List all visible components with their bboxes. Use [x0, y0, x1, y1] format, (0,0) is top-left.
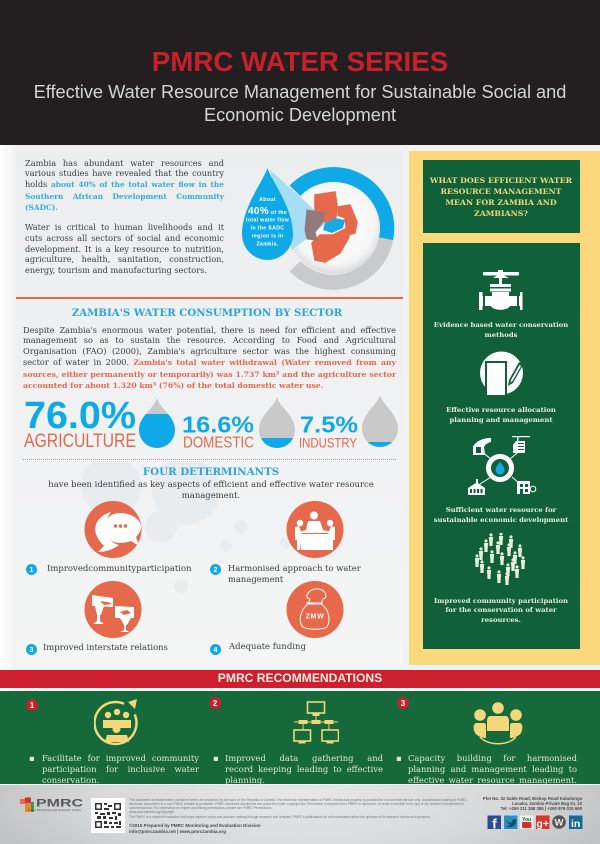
text: resource allocation: planning and management [449, 416, 553, 424]
consumption paragraph: management so as to sustain the resource. According to Food and Agricultural [23, 335, 396, 345]
social icons [487, 815, 583, 830]
left panel background [16, 151, 403, 665]
agriculture figure [24, 398, 175, 448]
recommendations banner: PMRC RECOMMENDATIONS [218, 671, 382, 685]
benefits list panel [422, 243, 580, 649]
question heading: RESOURCE MANAGEMENT [441, 187, 561, 196]
number badge 4: 4 [213, 645, 218, 654]
paragraph: water share: holds about 40% of the total water flow in the [25, 179, 224, 189]
map graphic: SADC donut and drop: About [259, 197, 276, 203]
consumption paragraph: sector of water in 2000. Zambia's total water withdrawal (Water removed from any [23, 357, 396, 367]
orange divider [16, 296, 403, 298]
text: recommendation 3: planning and management leading to [408, 764, 577, 774]
text: recommendation 2: Improved data gathering and [225, 752, 383, 762]
social icons: You [522, 817, 531, 823]
map graphic: SADC donut and drop: 40% of the [248, 206, 287, 217]
subtitle [34, 82, 566, 125]
label 2: management [228, 574, 283, 584]
map graphic: SADC donut and drop: total water flow [246, 218, 290, 224]
label 3: Improved interstate relations [43, 642, 168, 652]
legal text: This document and trademarks contained herein are protected by the laws of The Republic of Zambia. The electronic representation of PMRC intellectual property is provided for non-commercial use only. Unauthorized posting of PMRC electronic documents to a non-PMRC website is prohibited. PMRC electronic documents are protected under copyright law. Permission is required from PMRC to reproduce, or reuse in another form, any of our research documents for commercial use. For information on reprint and linking permissions, please see PMRC Permissions. [129, 798, 467, 810]
address: Plot No. 32 Sable Road, Bishop Road Kabulonga [483, 796, 582, 801]
subtitle: Effective Water Resource Management for Sustainable Social and [34, 82, 566, 102]
subtitle: Economic Development [204, 104, 396, 124]
text: recommendation 3: effective water resource management. [408, 774, 577, 784]
paragraph: water share [24, 158, 224, 212]
text: sufficient water: Sufficient water resource for [446, 506, 556, 514]
text: community participation: for the conservation of water [445, 606, 557, 614]
text: resource allocation [446, 406, 556, 424]
consumption paragraph: Despite Zambia's enormous water potential, there is need for efficient and effective [23, 324, 396, 334]
paragraph: water share: Southern African Development Community [25, 192, 224, 201]
determinant 4 [210, 642, 306, 655]
label 1: Improvedcommunityparticipation [47, 564, 192, 574]
header band [0, 0, 600, 144]
domestic figure: DOMESTIC [183, 434, 254, 452]
legal text: The PMRC is a nonprofit institution that helps improve policy and decision making through research and analysis. PMRC's publications do not necessarily reflect the opinions of its research clients and sponsors. [129, 815, 431, 819]
recommendations banner [0, 670, 600, 688]
text: conservation methods: Evidence based water conservation [434, 321, 568, 329]
text: community participation [434, 596, 568, 624]
social icons: g+ [536, 818, 549, 830]
text: community participation: Improved community participation [434, 596, 568, 604]
consumption paragraph: accounted for about 1.320 km³ (76%) of the total domestic water use. [23, 381, 323, 390]
QR code [91, 798, 125, 833]
copyright credit [129, 822, 299, 836]
map graphic: SADC donut and drop [242, 167, 394, 290]
panel: what efficient management means [409, 151, 600, 665]
badge 3: 3 [401, 699, 406, 708]
PMRC logo [18, 796, 84, 814]
dotted divider [23, 459, 396, 460]
text: conservation methods: methods [485, 330, 517, 338]
paragraph: critical to livelihoods: Water is critical to human livelihoods and it [25, 222, 224, 232]
text: community participation: resources. [481, 616, 521, 624]
PMRC logo: PMRC [36, 798, 83, 810]
panel: recommendations [0, 691, 600, 784]
badge 3 [397, 697, 409, 709]
text: recommendation 2: planning. [225, 774, 265, 784]
icon: network [293, 701, 339, 744]
number badge 4 [210, 644, 221, 655]
social icons: in [571, 818, 580, 830]
icon: speech bubbles [84, 501, 142, 558]
social icons: W [555, 818, 564, 828]
map graphic: SADC donut and drop: Zambia. [256, 242, 279, 248]
recommendation 1 [26, 699, 199, 784]
determinants intro [48, 478, 374, 500]
text: sufficient water: sustainable economic development [434, 516, 568, 524]
copyright credit: ©2015 Prepared by PMRC Monitoring and Evaluation Division [129, 822, 261, 828]
paragraph: critical to livelihoods: agriculture, health, sanitation, construction, [25, 254, 224, 264]
agriculture figure: 76.0% [24, 395, 136, 437]
industry figure: 7.5% [300, 412, 358, 438]
badge 2 [209, 697, 221, 709]
PMRC logo: Policy Monitoring and Research Centre [28, 808, 81, 812]
paragraph: water share: (SADC). [25, 203, 58, 212]
number badge 3: 3 [29, 645, 33, 654]
legal text: www.pmrczambia.org/copyright. [129, 810, 175, 814]
text: recommendation 1: ▪ [29, 752, 35, 762]
text: recommendation 1: participation for inclusive water [42, 764, 199, 774]
sector statistics [24, 395, 398, 452]
agriculture figure: AGRICULTURE [24, 430, 136, 452]
paragraph: critical to livelihoods: development. It is a key resource to nutrition, [25, 244, 224, 254]
badge 1: 1 [30, 701, 35, 710]
map graphic: SADC donut and drop: in the SADC [251, 226, 284, 232]
text: resource allocation: Effective resource allocation [446, 406, 556, 414]
copyright credit: info@pmrczambia.net | www.pmrczambia.org [129, 828, 226, 834]
consumption paragraph: sources, either permanently or temporarily) was 1.737 km³ and the agriculture sector [23, 370, 396, 379]
address: Tel: +260 211 268 385 | +260 979 015 660 [501, 806, 582, 811]
address: Lusaka, Zambia Private Bag KL 10 [512, 801, 582, 806]
consumption paragraph [23, 324, 396, 390]
paragraph: water share: Zambia has abundant water resources and [25, 158, 224, 168]
text: sufficient water [434, 506, 568, 524]
text: recommendation 1: conservation. [42, 774, 99, 784]
text: recommendation 3: ▪ [396, 752, 402, 762]
determinant 1 [26, 564, 192, 575]
label 2: Harmonised approach to water [228, 563, 361, 573]
industry figure [300, 396, 398, 448]
icon: meeting table [286, 501, 344, 558]
paragraph: critical to livelihoods [25, 222, 224, 275]
icon: money bag: ZMW [306, 614, 324, 620]
label 4: Adequate funding [229, 642, 306, 652]
faint water splash [81, 461, 291, 593]
icon: community cycle [94, 699, 138, 746]
text: conservation methods [434, 321, 568, 338]
number badge 1: 1 [29, 565, 33, 574]
icon: money bag [286, 581, 344, 638]
determinants intro: management. [182, 490, 240, 500]
paragraph: water share: various studies have revealed that the country [25, 168, 224, 178]
icon: team [474, 702, 522, 744]
icon: interstate relations [84, 581, 142, 638]
text: recommendation 3 [390, 752, 580, 786]
question heading [422, 160, 580, 233]
icon: crowd [475, 533, 526, 585]
paragraph: critical to livelihoods: cuts across all sectors of social and economic [25, 233, 224, 243]
title: PMRC WATER SERIES [152, 46, 448, 77]
text: recommendation 1: Facilitate for improved community [42, 752, 199, 762]
paragraph: critical to livelihoods: energy, tourism and manufacturing sectors. [25, 265, 207, 275]
determinant 2 [210, 563, 361, 584]
number badge 2: 2 [213, 565, 218, 574]
intro text [24, 158, 224, 275]
industry figure: INDUSTRY [299, 436, 357, 450]
badge 2: 2 [213, 699, 218, 708]
map graphic: SADC donut and drop: region is in [252, 234, 283, 240]
consumption paragraph: Organisation (FAO) (2000), Zambia's agriculture sector was the highest consuming [23, 346, 396, 356]
question heading: ZAMBIANS? [474, 209, 528, 218]
text: recommendation 3: Capacity building for harmonised [408, 752, 577, 762]
icon: water hub [468, 436, 536, 495]
text: recommendation 2: record keeping leading to effective [225, 764, 383, 774]
recommendation 3 [396, 697, 577, 785]
heading: four determinants: FOUR DETERMINANTS [143, 466, 279, 478]
icon: notebook and pencil [480, 352, 523, 395]
label 2 [228, 563, 361, 584]
determinant 3 [26, 642, 168, 655]
question heading: MEAN FOR ZAMBIA AND [445, 198, 557, 207]
footer [0, 785, 600, 844]
legal text [129, 798, 471, 822]
number badge 1 [26, 564, 37, 575]
number badge 2 [210, 564, 221, 575]
domestic figure: 16.6% [182, 412, 254, 438]
text: recommendation 1 [29, 752, 199, 784]
address [470, 796, 582, 812]
number badge 3 [26, 644, 37, 655]
question heading: WHAT DOES EFFICIENT WATER [430, 176, 572, 185]
determinants intro: have been identified as key aspects of efficient and effective water resource [48, 478, 374, 488]
text: recommendation 2: ▪ [213, 752, 219, 762]
badge 1 [26, 699, 38, 711]
recommendation 2 [209, 697, 383, 785]
domestic figure [184, 398, 295, 448]
heading: water consumption: ZAMBIA'S WATER CONSUMPTION BY SECTOR [72, 307, 342, 319]
text: recommendation 2 [213, 752, 383, 785]
icon: valve [479, 270, 522, 310]
